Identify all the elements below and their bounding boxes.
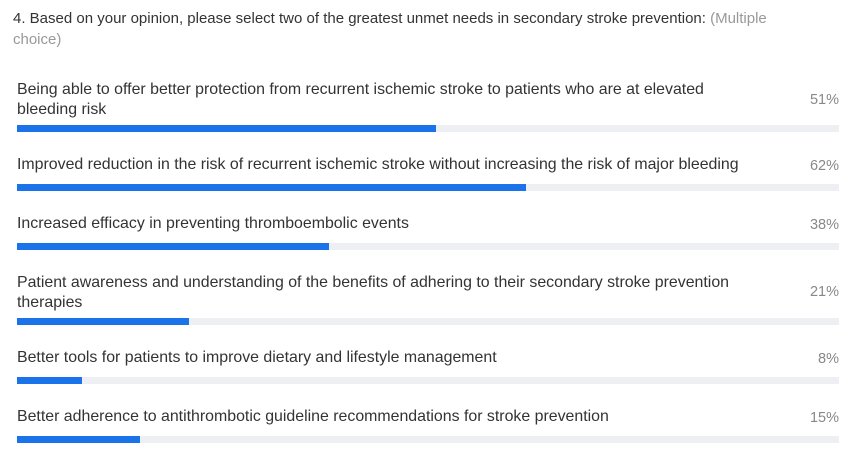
item 3: 38% [810,217,839,233]
item 4: 21% [810,284,839,300]
item 6 [17,408,839,443]
item 2: 62% [810,158,839,174]
item 4: therapies [17,294,82,311]
title: 4. Based on your opinion, please select two of the greatest unmet needs in secondary stroke prevention: (Multiple [13,10,767,27]
item 6: 15% [810,410,839,426]
item 4: Patient awareness and understanding of the benefits of adhering to their secondary stroke prevention [17,274,729,291]
item 1: Being able to offer better protection from recurrent ischemic stroke to patients who are at elevated [17,81,704,98]
item 3: Increased efficacy in preventing thromboembolic events [17,215,409,232]
item 5: Better tools for patients to improve dietary and lifestyle management [17,349,497,366]
item 1: 51% [810,92,839,108]
item 2: Improved reduction in the risk of recurrent ischemic stroke without increasing the risk of major bleeding [17,156,739,173]
title [13,10,767,48]
item 2 [17,156,839,191]
item 5: 8% [818,351,839,367]
item 6: Better adherence to antithrombotic guideline recommendations for stroke prevention [17,408,609,425]
item 1 [17,81,839,132]
item 1: bleeding risk [17,101,106,118]
item 4 [17,274,839,325]
item 3 [17,215,839,250]
item 5 [17,349,839,384]
title: choice) [13,31,61,48]
